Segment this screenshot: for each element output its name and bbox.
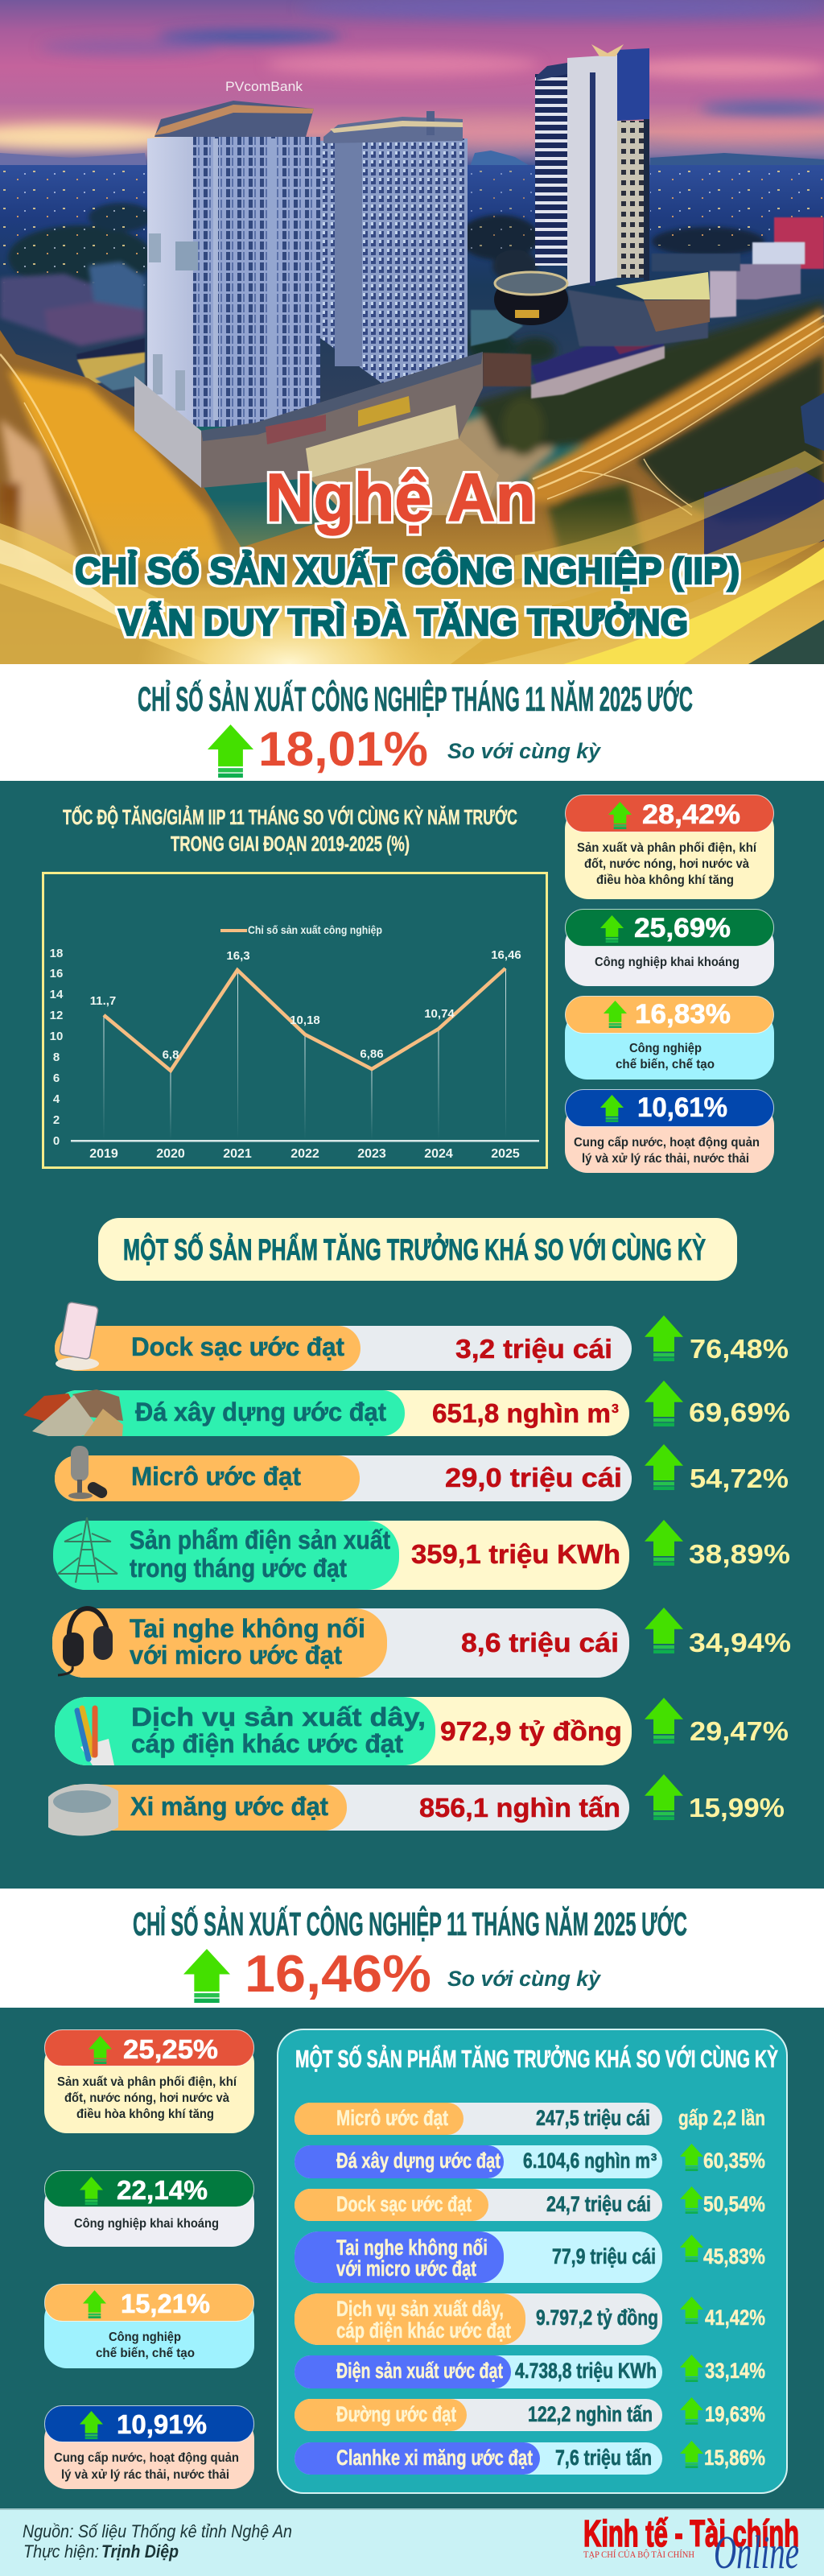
- title: Nghe An: Nghệ An: [266, 460, 536, 535]
- legend: Chỉ số sản xuất công nghiệp: [248, 923, 382, 936]
- logo: TẠP CHÍ CỦA BỘ TÀI CHÍNH: [583, 2549, 694, 2560]
- gold waves: [0, 451, 824, 664]
- value: 16,46%: [245, 1944, 431, 2003]
- data labels: 16,3: [226, 949, 250, 963]
- row: cables: [55, 1697, 789, 1765]
- avenue: [523, 310, 824, 503]
- data labels: 6,8: [163, 1048, 179, 1062]
- row: stone: 3: [651, 2151, 657, 2163]
- navy roofs right: [801, 393, 824, 451]
- y axis: 12: [50, 1009, 63, 1022]
- row: headphones: 8,6 triệu cái: [461, 1628, 619, 1657]
- PVcomBank rooftop sign: PVcomBank: [225, 79, 303, 94]
- card: electricity 25,25%: [44, 2030, 254, 2133]
- row: cables: 9.797,2 tỷ đồng: [536, 2306, 658, 2330]
- card: mining 25,69%: Công nghiệp khai khoáng: [595, 956, 740, 969]
- row: stone: [23, 1381, 790, 1436]
- row: microphone: [295, 2103, 765, 2135]
- row: sugar: Đường ước đạt: [336, 2402, 456, 2426]
- icon: microphone: [68, 1446, 109, 1501]
- row: cables: Dịch vụ sản xuất dây,: [336, 2297, 504, 2321]
- row: microphone: Micrô ước đạt: [131, 1462, 301, 1491]
- row: dock: Dock sạc ước đạt: [336, 2192, 472, 2216]
- card: electricity 25,25%: điều hòa không khí tăng: [76, 2107, 214, 2121]
- row: stone: 3: [612, 1402, 619, 1416]
- year labels: 2021: [223, 1147, 252, 1161]
- data labels: 16,46: [491, 948, 521, 962]
- card: electricity 25,25%: 25,25%: [123, 2034, 218, 2064]
- card: manufacturing 15,21%: 15,21%: [121, 2289, 210, 2318]
- row: cement: [48, 1774, 785, 1836]
- second tower: [320, 138, 468, 386]
- icon: headphones: [58, 1608, 113, 1675]
- card: mining 22,14%: Công nghiệp khai khoáng: [74, 2217, 219, 2231]
- heading: growth 2019-2025: TỐC ĐỘ TĂNG/GIẢM IIP 11 THÁNG SO VỚI CÙNG KỲ NĂM TRƯỚC: [63, 805, 517, 829]
- heading: growth 2019-2025: [63, 805, 517, 856]
- row: dock: [295, 2186, 765, 2221]
- banner: products heading: [98, 1218, 737, 1281]
- round building and gold roof: [494, 274, 568, 325]
- logo: [583, 2512, 799, 2576]
- distant hills: [0, 153, 146, 165]
- icon: cement bag: [48, 1784, 118, 1836]
- row: microphone: 247,5 triệu cái: [536, 2106, 650, 2130]
- row: electricity: 38,89%: [689, 1539, 790, 1569]
- panel: November index: [0, 664, 824, 781]
- row: sugar: 122,2 nghìn tấn: [528, 2402, 653, 2426]
- row: stone: [295, 2144, 765, 2178]
- y axis: 4: [53, 1092, 60, 1106]
- icon: power pylon: [58, 1517, 117, 1583]
- row: electricity: 359,1 triệu KWh: [411, 1539, 620, 1569]
- row: sugar: 19,63%: [705, 2402, 765, 2426]
- y axis: 8: [53, 1051, 60, 1064]
- card: water 10,61%: 10,61%: [637, 1092, 727, 1123]
- row: headphones: Tai nghe không nối: [130, 1614, 365, 1643]
- row: stone: 60,35%: [703, 2149, 765, 2173]
- row: cables: 41,42%: [705, 2306, 765, 2330]
- card: electricity 28,42%: đốt, nước nóng, hơi nước và: [584, 857, 749, 871]
- panel: 11-month index: [0, 1889, 824, 2008]
- first tower: [193, 137, 320, 427]
- icon: up arrow: [183, 1949, 230, 2003]
- card: electricity 28,42%: điều hòa không khí tăng: [596, 873, 734, 887]
- row: cables: [295, 2293, 765, 2345]
- card: water 10,91%: Cung cấp nước, hoạt động quản: [54, 2451, 239, 2465]
- year labels: 2020: [156, 1147, 185, 1161]
- row: headphones: [52, 1608, 791, 1678]
- row: dock: 76,48%: [690, 1334, 789, 1364]
- row: headphones: 77,9 triệu cái: [552, 2244, 656, 2268]
- source credit: Trịnh Diệp: [101, 2541, 179, 2562]
- row: dock: Dock sạc ước đạt: [131, 1332, 344, 1361]
- y axis: 18: [50, 947, 63, 960]
- icon: stone piles: [23, 1389, 123, 1436]
- x axis: [71, 1140, 539, 1141]
- year labels: 2025: [491, 1147, 520, 1161]
- card: electricity 28,42%: Sản xuất và phân phối điện, khí: [577, 841, 757, 855]
- title line 1: CHỈ SỐ SẢN XUẤT CÔNG NGHIỆP (IIP): [75, 550, 740, 592]
- icon: phone on charger: [56, 1302, 99, 1370]
- row: clinker: 15,86%: [704, 2446, 765, 2470]
- street light trails: [0, 316, 824, 564]
- year labels: 2023: [357, 1147, 386, 1161]
- data labels: 10,74: [424, 1007, 455, 1021]
- low building roofs: [531, 343, 665, 383]
- heading: growth 2019-2025: TRONG GIAI ĐOẠN 2019-2025 (%): [171, 832, 410, 856]
- row: stone: 651,8 nghìn m: [432, 1398, 611, 1428]
- year labels: [89, 1147, 520, 1161]
- third tower: [535, 74, 567, 266]
- card: electricity 25,25%: Sản xuất và phân phối điện, khí: [57, 2075, 237, 2089]
- row: electricity: Điện sản xuất ước đạt: [336, 2359, 503, 2383]
- row: clinker: [295, 2441, 765, 2475]
- row: headphones: Tai nghe không nối: [336, 2235, 488, 2260]
- footer: [0, 2508, 824, 2576]
- row: microphone: Micrô ước đạt: [336, 2106, 448, 2130]
- distant city: [0, 165, 824, 407]
- row: cables: cáp điện khác ước đạt: [131, 1729, 403, 1758]
- row: microphone: 54,72%: [690, 1463, 789, 1493]
- note: So với cùng kỳ: [447, 1967, 602, 1991]
- card: mining 25,69%: 25,69%: [634, 913, 731, 943]
- row: clinker: Clanhke xi măng ước đạt: [336, 2446, 533, 2470]
- card: electricity 25,25%: đốt, nước nóng, hơi nước và: [64, 2091, 229, 2105]
- y axis: 16: [50, 967, 63, 980]
- y axis: [50, 947, 64, 1148]
- fade over photo: [0, 499, 824, 664]
- card: mining 25,69%: [565, 910, 774, 986]
- row: stone: 6.104,6 nghìn m: [523, 2149, 650, 2173]
- row: headphones: 45,83%: [703, 2244, 765, 2268]
- row: cement: Xi măng ước đạt: [130, 1792, 328, 1821]
- source credit: Thực hiện:: [23, 2541, 99, 2562]
- row: headphones: với micro ước đạt: [130, 1641, 342, 1670]
- card: water 10,61%: [565, 1090, 774, 1173]
- row: electricity: trong tháng ước đạt: [130, 1554, 347, 1583]
- hotel rooftop sign: [591, 44, 624, 56]
- row: cables: cáp điện khác ước đạt: [336, 2318, 511, 2343]
- houses left: [0, 262, 145, 346]
- sky: [0, 0, 824, 165]
- row: dock: [55, 1302, 789, 1371]
- card: manufacturing 16,83%: chế biến, chế tạo: [616, 1058, 715, 1071]
- row: headphones: với micro ước đạt: [336, 2256, 476, 2281]
- row: clinker: 7,6 triệu tấn: [555, 2446, 652, 2470]
- card: mining 22,14%: [44, 2170, 254, 2247]
- line chart: [43, 873, 547, 1167]
- panel: products 11 months: [278, 2029, 787, 2493]
- source credit: Nguồn: Số liệu Thống kê tỉnh Nghệ An: [23, 2521, 292, 2541]
- drop lines: [103, 968, 506, 1140]
- row: electricity: [295, 2355, 765, 2388]
- title line 2: VẪN DUY TRÌ ĐÀ TĂNG TRƯỞNG: [118, 601, 688, 643]
- data labels: 11.,7: [90, 994, 116, 1008]
- row: stone: Đá xây dựng ước đạt: [135, 1397, 386, 1426]
- year labels: 2022: [290, 1147, 319, 1161]
- row: cables: 972,9 tỷ đồng: [440, 1716, 622, 1746]
- card: manufacturing 15,21%: chế biến, chế tạo: [96, 2347, 195, 2360]
- data labels: [90, 948, 521, 1062]
- icon: cables: [77, 1708, 114, 1765]
- row: dock: 24,7 triệu cái: [546, 2192, 651, 2216]
- row: headphones: [295, 2231, 765, 2283]
- main title: [75, 460, 740, 643]
- data labels: 10,18: [290, 1013, 320, 1027]
- row: electricity: [53, 1517, 790, 1590]
- row: dock: 50,54%: [703, 2192, 765, 2216]
- year labels: 2019: [89, 1147, 118, 1161]
- card: electricity 28,42%: [565, 795, 774, 899]
- row: sugar: [295, 2397, 765, 2431]
- series line: [104, 968, 505, 1071]
- y axis: 6: [53, 1071, 60, 1085]
- y axis: 2: [53, 1113, 60, 1127]
- y axis: 0: [53, 1134, 60, 1148]
- row: stone: 69,69%: [689, 1397, 790, 1427]
- row: dock: 3,2 triệu cái: [455, 1334, 612, 1364]
- distant buildings right: [471, 217, 824, 398]
- row: electricity: 4.738,8 triệu KWh: [515, 2359, 657, 2383]
- row: stone: Đá xây dựng ước đạt: [336, 2149, 501, 2173]
- card: manufacturing 16,83%: Công nghiệp: [629, 1042, 702, 1055]
- data labels: 6,86: [360, 1047, 384, 1061]
- card: manufacturing 15,21%: Công nghiệp: [109, 2330, 181, 2344]
- row: electricity: Sản phẩm điện sản xuất: [130, 1525, 390, 1554]
- card: manufacturing 16,83%: 16,83%: [635, 999, 731, 1030]
- card: mining 22,14%: 22,14%: [117, 2175, 208, 2205]
- y axis: 14: [50, 988, 64, 1001]
- trees along the avenue: [475, 299, 824, 451]
- card: manufacturing 16,83%: [565, 997, 774, 1080]
- ground and streets: [0, 322, 824, 590]
- source credit: [23, 2521, 292, 2562]
- y axis: 10: [50, 1030, 63, 1043]
- row: microphone: 29,0 triệu cái: [445, 1463, 622, 1492]
- hero photo: Nghe An skyline: [0, 0, 824, 737]
- podium: [134, 376, 201, 488]
- row: cables: 29,47%: [690, 1716, 789, 1746]
- value: 18,01%: [258, 722, 428, 776]
- card: water 10,91%: 10,91%: [117, 2409, 207, 2439]
- note: So với cùng kỳ: [447, 739, 602, 763]
- row: microphone: [55, 1444, 789, 1501]
- card: water 10,61%: lý và xử lý rác thải, nước thải: [582, 1152, 749, 1166]
- year labels: 2024: [424, 1147, 453, 1161]
- row: cement: 856,1 nghìn tấn: [419, 1793, 620, 1823]
- row: cement: 15,99%: [689, 1793, 785, 1823]
- card: water 10,91%: lý và xử lý rác thải, nước thải: [61, 2468, 229, 2482]
- card: water 10,91%: [44, 2405, 254, 2489]
- card: electricity 28,42%: 28,42%: [642, 799, 740, 830]
- row: microphone: gấp 2,2 lần: [678, 2106, 765, 2130]
- row: electricity: 33,14%: [705, 2359, 765, 2383]
- card: manufacturing 15,21%: [44, 2285, 254, 2368]
- row: cables: Dịch vụ sản xuất dây,: [131, 1703, 426, 1732]
- row: headphones: 34,94%: [689, 1628, 791, 1657]
- card: water 10,61%: Cung cấp nước, hoạt động quản: [574, 1136, 760, 1150]
- icon: up arrow: [208, 724, 253, 778]
